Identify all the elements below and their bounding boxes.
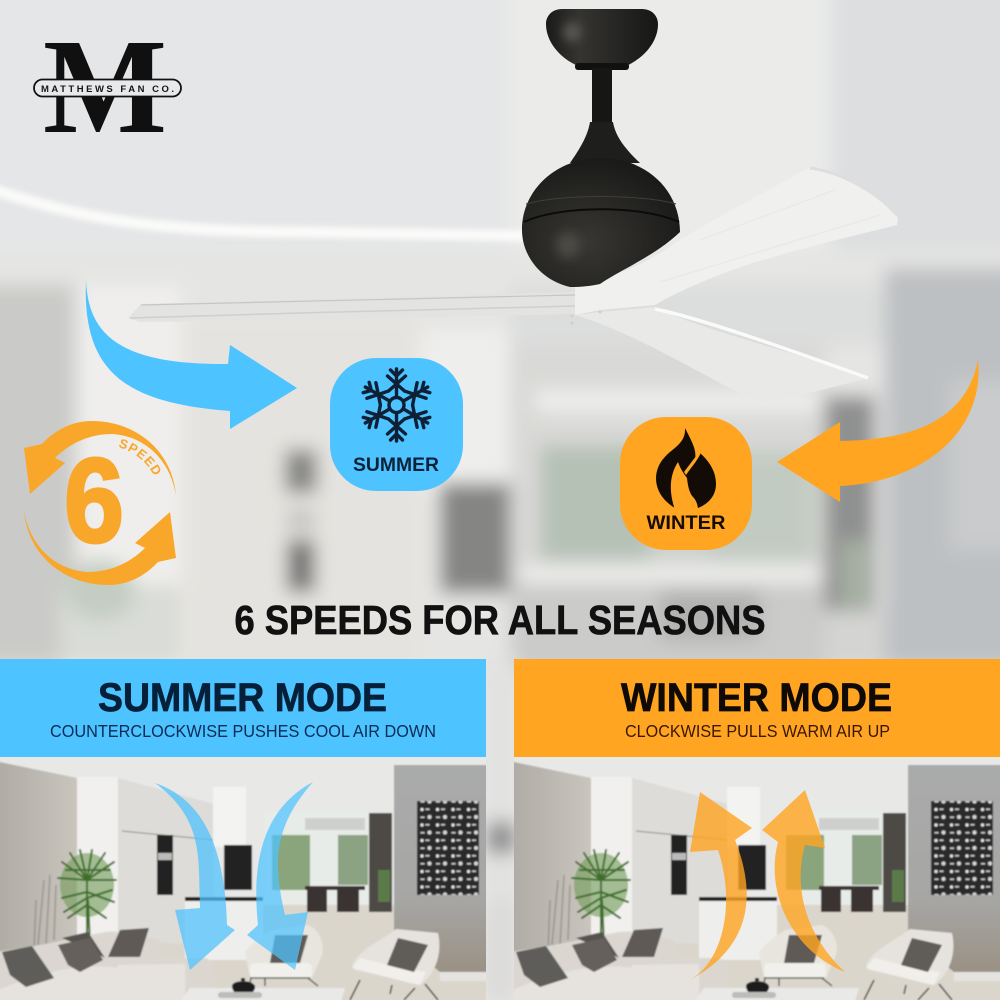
logo: Matthews Fan Co.: M	[43, 12, 167, 162]
summer label: SUMMER	[353, 455, 439, 476]
panel: winter mode	[509, 659, 1000, 1000]
winter heading: WINTER MODE	[621, 676, 892, 720]
icon: 6 speed badge: 6	[64, 434, 124, 568]
winter banner	[514, 659, 1000, 757]
main heading: 6 SPEEDS FOR ALL SEASONS	[234, 597, 766, 643]
panel: summer mode	[0, 659, 495, 1000]
summer arrows: cool air down	[155, 782, 313, 970]
arrow: blue summer airflow	[86, 280, 297, 429]
icon: 6 speed badge: SPEED	[119, 439, 160, 474]
winter arrows: warm air up	[690, 790, 845, 980]
summer subheading: COUNTERCLOCKWISE PUSHES COOL AIR DOWN	[50, 721, 436, 741]
fan: ceiling canopy, downrod and motor housing	[522, 9, 680, 287]
winter badge	[620, 417, 752, 550]
icon: flame	[656, 428, 716, 510]
logo: Matthews Fan Co.: MATTHEWS FAN CO.	[41, 84, 174, 95]
arrow: orange winter airflow	[777, 360, 979, 502]
winter label: WINTER	[646, 513, 726, 534]
fan: three white blades	[128, 167, 898, 403]
icon: snowflake	[361, 369, 432, 441]
summer badge	[330, 358, 463, 491]
icon: 6 speed badge	[24, 421, 176, 585]
winter subheading: CLOCKWISE PULLS WARM AIR UP	[625, 721, 890, 741]
summer banner	[0, 659, 486, 757]
summer heading: SUMMER MODE	[98, 676, 387, 720]
summer room photo	[0, 750, 495, 1000]
winter room photo	[509, 750, 1000, 1000]
